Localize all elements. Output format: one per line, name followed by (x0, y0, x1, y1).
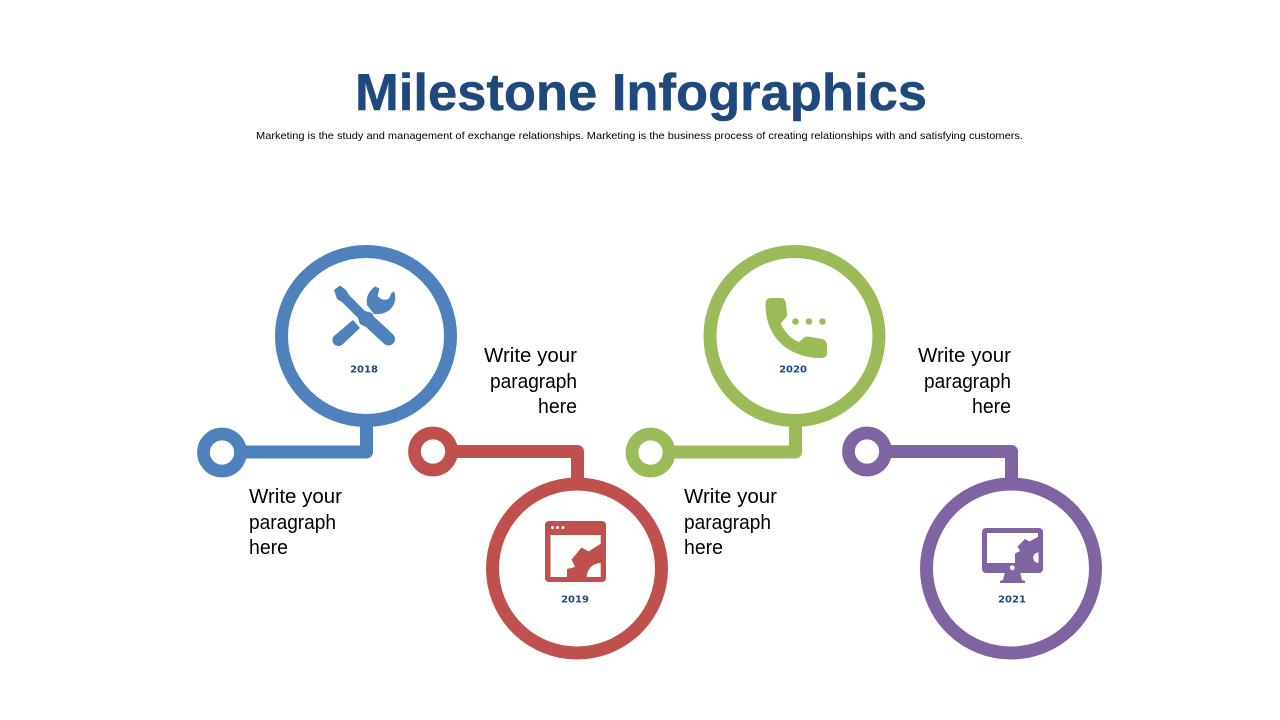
connector 2019 (450, 452, 578, 485)
paragraph 2019 (484, 345, 577, 418)
paragraph 2020: here (684, 537, 723, 559)
paragraph 2019: here (538, 396, 577, 418)
milestone 2018 (204, 252, 450, 559)
icon: browser gear (545, 521, 606, 582)
paragraph 2020: paragraph (684, 512, 771, 534)
paragraph 2018: Write your (249, 486, 342, 508)
node 2019 (414, 433, 452, 470)
paragraph 2021: here (972, 396, 1011, 418)
paragraph 2019: Write your (484, 345, 577, 367)
node 2018 (204, 434, 240, 471)
milestone 2020 (632, 252, 879, 559)
connector 2021 (885, 452, 1012, 485)
title: Milestone Infographics (355, 64, 927, 122)
icon: phone (766, 298, 827, 358)
paragraph 2020 (684, 486, 777, 559)
paragraph 2021: Write your (918, 345, 1011, 367)
connector 2018 (240, 420, 366, 452)
icon: tools (332, 286, 395, 346)
icon: monitor gear (982, 528, 1043, 583)
ring 2019 (492, 484, 662, 653)
paragraph 2018: paragraph (249, 512, 336, 534)
milestone 2019 (414, 345, 662, 653)
ring 2018 (282, 252, 450, 420)
paragraph 2021 (918, 345, 1011, 418)
paragraph 2020: Write your (684, 486, 777, 508)
paragraph 2021: paragraph (924, 371, 1011, 393)
paragraph 2018 (249, 486, 342, 559)
connector 2020 (668, 420, 796, 452)
milestone 2021 (848, 345, 1096, 653)
node 2021 (848, 433, 886, 470)
subtitle: Marketing is the study and management of exchange relationships. Marketing is the business process of creating relationships with and satisfying customers. (256, 130, 1023, 142)
year 2019: 2019 (561, 594, 589, 606)
year 2018: 2018 (350, 364, 378, 376)
year 2020: 2020 (779, 364, 807, 376)
year 2021: 2021 (998, 594, 1026, 606)
ring 2021 (926, 484, 1096, 653)
ring 2020 (710, 252, 879, 420)
paragraph 2019: paragraph (490, 371, 577, 393)
paragraph 2018: here (249, 537, 288, 559)
node 2020 (632, 434, 669, 471)
